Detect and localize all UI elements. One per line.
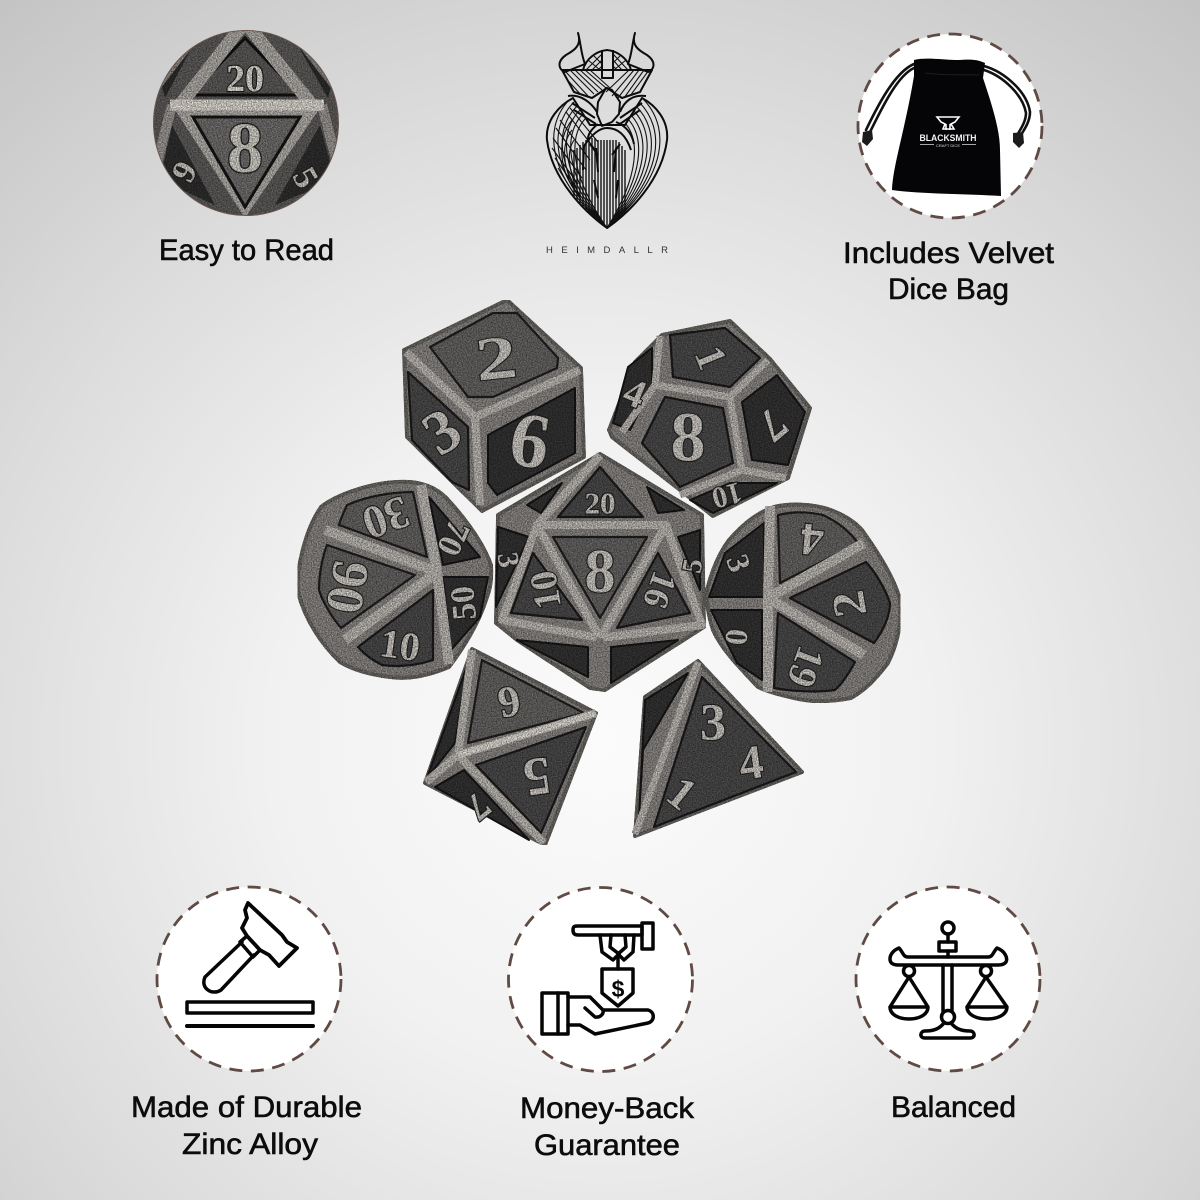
die: percentile d10 left: 30 xyxy=(356,486,416,550)
dashed circle xyxy=(508,888,692,1072)
label xyxy=(131,1091,362,1161)
die: percentile d10 left: 90 xyxy=(314,556,380,618)
die: d20: 8 xyxy=(584,538,616,606)
feature: balanced xyxy=(856,887,1040,1124)
die: d6: 3 xyxy=(411,395,473,469)
close-up d20 photo circle: 8 xyxy=(227,108,263,188)
die: d20 xyxy=(490,454,709,690)
label: Easy to Read xyxy=(159,234,334,267)
bag body xyxy=(892,59,1001,196)
die: d10 right: 0 xyxy=(718,627,756,647)
die: d10 right: 3 xyxy=(719,549,759,577)
label: Includes Velvet xyxy=(843,237,1055,270)
die: d20: 20 xyxy=(584,486,616,520)
label xyxy=(843,237,1055,306)
die: d10 right xyxy=(707,505,900,701)
feature: durable zinc alloy xyxy=(131,887,362,1161)
close-up d20 photo circle: 5 xyxy=(285,161,325,195)
icon: hammer xyxy=(187,903,313,1026)
die: d4 pyramid right: 1 xyxy=(657,766,707,820)
bag drawing xyxy=(862,59,1030,196)
dashed circle xyxy=(157,887,341,1071)
logo wordmark: HEIMDALLR xyxy=(546,245,668,256)
die: d10 right: 4 xyxy=(798,514,826,566)
die: d20: 16 xyxy=(635,566,685,614)
label: Balanced xyxy=(891,1091,1016,1124)
die: percentile d10 left: 50 xyxy=(444,584,484,622)
icon: hand receiving coin xyxy=(542,923,653,1034)
feature: velvet bag xyxy=(843,34,1055,306)
die: d12: 8 xyxy=(670,400,706,476)
feature: easy to read xyxy=(150,22,344,267)
die: d20: 3 xyxy=(490,550,526,570)
die: d6 xyxy=(404,300,584,511)
die: percentile d10 left xyxy=(298,482,491,678)
dashed circle xyxy=(856,887,1040,1071)
close-up d20 photo circle xyxy=(153,30,339,216)
die: d20: 10 xyxy=(522,568,570,612)
dashed circle xyxy=(858,34,1042,218)
bag logo anvil xyxy=(937,117,959,130)
bag sub text: CRAFT DICE xyxy=(936,143,960,148)
label: Zinc Alloy xyxy=(182,1128,318,1161)
label: Guarantee xyxy=(534,1129,680,1162)
drawstrings xyxy=(866,64,1030,138)
die: d8 pyramid left xyxy=(425,649,596,845)
label xyxy=(520,1092,695,1162)
die: d12: 7 xyxy=(748,398,798,452)
knots xyxy=(862,130,873,146)
dice set photo xyxy=(298,300,900,845)
die: d4 pyramid right: 3 xyxy=(700,694,726,752)
die: d8 pyramid left: 5 xyxy=(519,745,555,809)
label: Money-Back xyxy=(520,1092,695,1125)
feature: money-back guarantee xyxy=(508,888,695,1162)
close-up d20 photo circle: 9 xyxy=(165,155,205,189)
die: d6: 2 xyxy=(472,322,520,394)
label: Made of Durable xyxy=(131,1091,362,1124)
horns xyxy=(559,33,654,72)
die: d10 right: 19 xyxy=(778,641,834,693)
beard and hatching xyxy=(547,88,667,228)
die: d8 pyramid left: 6 xyxy=(494,676,524,728)
die: d10 right: 2 xyxy=(821,587,877,621)
die: d20: 5 xyxy=(677,556,709,576)
die: d12: 4 xyxy=(617,368,653,418)
bag brand text: BLACKSMITH xyxy=(920,133,977,144)
die: d4 pyramid right: 4 xyxy=(735,735,767,791)
die: percentile d10 left: 70 xyxy=(429,515,477,561)
die: d4 pyramid right xyxy=(635,661,802,836)
logo: heimdallr viking head xyxy=(546,33,668,256)
icon: balance scale xyxy=(890,922,1007,1038)
die: percentile d10 left: 10 xyxy=(377,620,423,670)
helmet xyxy=(562,50,652,98)
die: d8 pyramid left: 7 xyxy=(457,784,499,828)
die: d12: 10 xyxy=(708,475,746,515)
label: Dice Bag xyxy=(888,273,1009,306)
die: d6: 6 xyxy=(503,394,557,486)
die: d12 xyxy=(609,321,810,516)
close-up d20 photo circle: 20 xyxy=(226,58,264,100)
die: d12: 1 xyxy=(685,340,735,376)
icon: hand receiving coin: $ xyxy=(612,976,625,1002)
